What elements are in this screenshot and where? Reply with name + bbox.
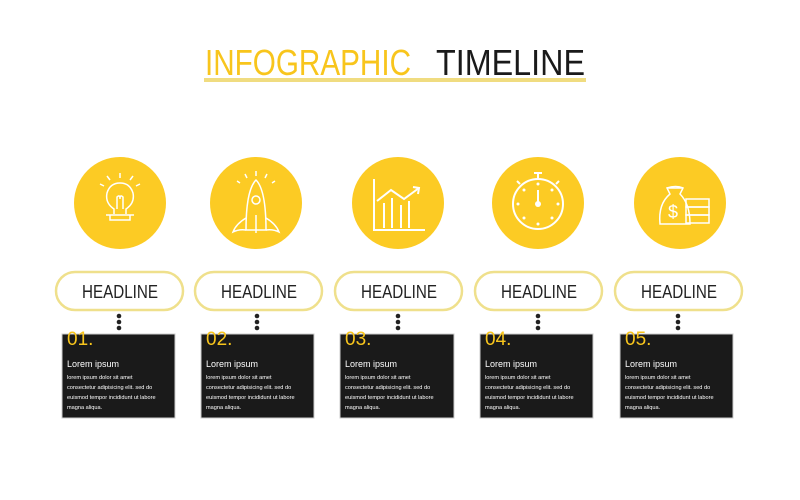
text box: [62, 329, 175, 418]
icon: money bag: $: [668, 202, 678, 222]
headline pill: [195, 272, 322, 310]
text box: magna aliqua.: [206, 405, 242, 411]
text box: lorem ipsum dolor sit amet: [206, 375, 272, 381]
text box: euismod tempor incididunt ut labore: [485, 395, 574, 401]
icon: money bag: [634, 157, 726, 249]
text box: consectetur adipisicing elit. sed do: [206, 385, 291, 391]
headline pill: [475, 272, 602, 310]
text box: magna aliqua.: [625, 405, 661, 411]
text box: lorem ipsum dolor sit amet: [485, 375, 551, 381]
icon: light bulb: [74, 157, 166, 249]
text box: consectetur adipisicing elit. sed do: [485, 385, 570, 391]
text box: [340, 329, 454, 418]
icon: chart: [352, 157, 444, 249]
title: TIMELINE: [436, 42, 585, 83]
text box: Lorem ipsum: [485, 359, 537, 369]
text box: [620, 329, 733, 418]
text box: consectetur adipisicing elit. sed do: [345, 385, 430, 391]
text box: consectetur adipisicing elit. sed do: [67, 385, 152, 391]
text box: Lorem ipsum: [67, 359, 119, 369]
connector dots: [117, 314, 121, 330]
text box: magna aliqua.: [485, 405, 521, 411]
text box: euismod tempor incididunt ut labore: [206, 395, 295, 401]
text box: Lorem ipsum: [625, 359, 677, 369]
connector dots: [255, 314, 259, 330]
icon: stopwatch: [492, 157, 584, 249]
text box: 05.: [625, 329, 651, 350]
text box: 04.: [485, 329, 511, 350]
text box: [480, 329, 593, 418]
text box: euismod tempor incididunt ut labore: [67, 395, 156, 401]
text box: consectetur adipisicing elit. sed do: [625, 385, 710, 391]
step 2: [195, 157, 322, 418]
text box: [201, 329, 314, 418]
text box: euismod tempor incididunt ut labore: [345, 395, 434, 401]
text box: magna aliqua.: [345, 405, 381, 411]
headline pill: HEADLINE: [82, 282, 158, 302]
text box: magna aliqua.: [67, 405, 103, 411]
headline pill: [56, 272, 183, 310]
headline pill: HEADLINE: [641, 282, 717, 302]
step 3: [335, 157, 462, 418]
headline pill: HEADLINE: [361, 282, 437, 302]
text box: 01.: [67, 329, 93, 350]
headline pill: HEADLINE: [501, 282, 577, 302]
text box: Lorem ipsum: [345, 359, 397, 369]
text box: euismod tempor incididunt ut labore: [625, 395, 714, 401]
text box: lorem ipsum dolor sit amet: [625, 375, 691, 381]
text box: 03.: [345, 329, 371, 350]
text box: 02.: [206, 329, 232, 350]
step 4: [475, 157, 602, 418]
text box: lorem ipsum dolor sit amet: [67, 375, 133, 381]
headline pill: [615, 272, 742, 310]
connector dots: [536, 314, 540, 330]
text box: Lorem ipsum: [206, 359, 258, 369]
headline pill: HEADLINE: [221, 282, 297, 302]
title: INFOGRAPHIC: [205, 42, 411, 83]
title: [204, 42, 586, 83]
text box: lorem ipsum dolor sit amet: [345, 375, 411, 381]
connector dots: [396, 314, 400, 330]
headline pill: [335, 272, 462, 310]
step 5: [615, 157, 742, 418]
icon: rocket: [210, 157, 302, 249]
step 1: [56, 157, 183, 418]
connector dots: [676, 314, 680, 330]
